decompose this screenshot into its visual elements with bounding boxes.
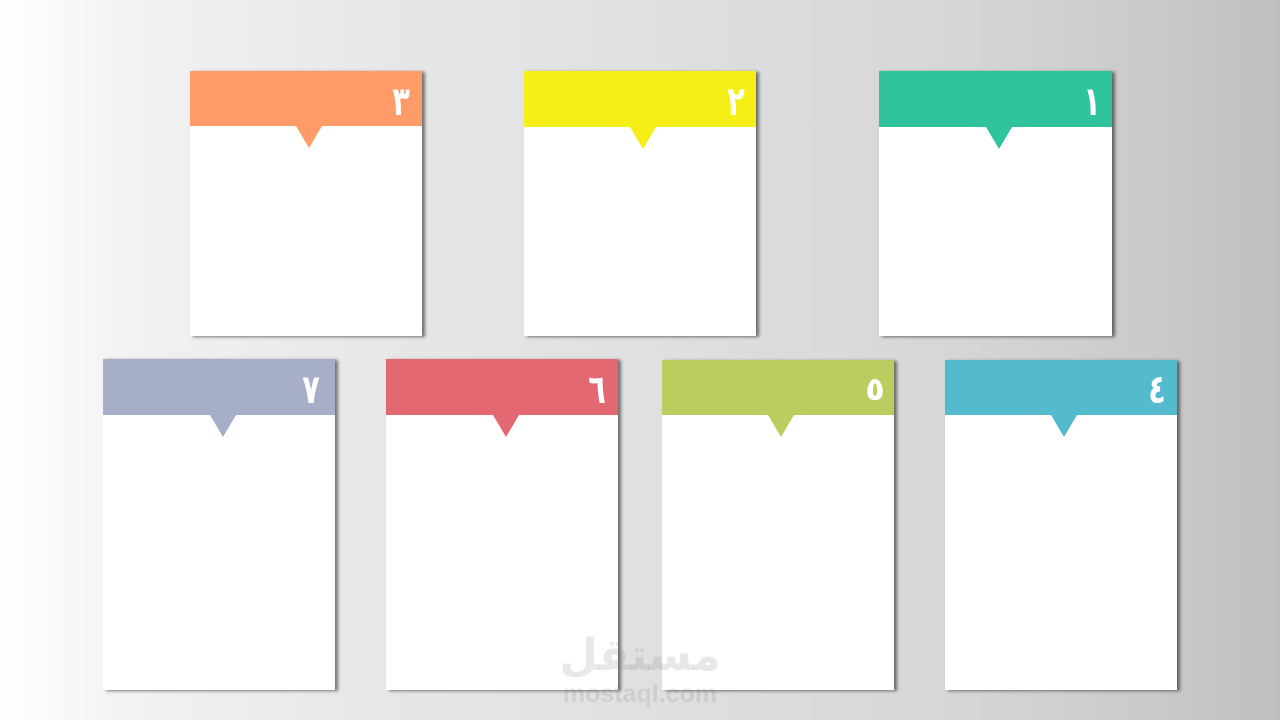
header band bbox=[386, 359, 618, 415]
watermark latin: mostaql.com bbox=[563, 680, 717, 708]
card 6: red bbox=[386, 359, 618, 690]
card 2: yellow bbox=[524, 71, 756, 336]
card 3: orange bbox=[190, 71, 422, 336]
number 1: ١ bbox=[1083, 79, 1101, 125]
number 6: ٦ bbox=[588, 367, 606, 413]
number 2: ٢ bbox=[727, 79, 745, 125]
number 7: ٧ bbox=[302, 367, 320, 413]
card 5: olive bbox=[662, 360, 894, 690]
header band bbox=[190, 71, 422, 126]
header band bbox=[662, 360, 894, 415]
header band bbox=[945, 360, 1177, 415]
pointer bbox=[630, 127, 656, 149]
number 4: ٤ bbox=[1148, 367, 1166, 413]
pointer bbox=[493, 415, 519, 437]
header band bbox=[103, 359, 335, 415]
pointer bbox=[768, 415, 794, 437]
number 5: ٥ bbox=[865, 370, 885, 408]
pointer bbox=[296, 126, 322, 148]
header band bbox=[524, 71, 756, 127]
pointer bbox=[1051, 415, 1077, 437]
card 7: lavender bbox=[103, 359, 335, 690]
header band bbox=[879, 71, 1112, 127]
number 3: ٣ bbox=[392, 79, 410, 125]
pointer bbox=[210, 415, 236, 437]
watermark arabic: مستقل bbox=[560, 630, 720, 681]
pointer bbox=[986, 127, 1012, 149]
card 4: blue bbox=[945, 360, 1177, 690]
card 1: green bbox=[879, 71, 1112, 336]
